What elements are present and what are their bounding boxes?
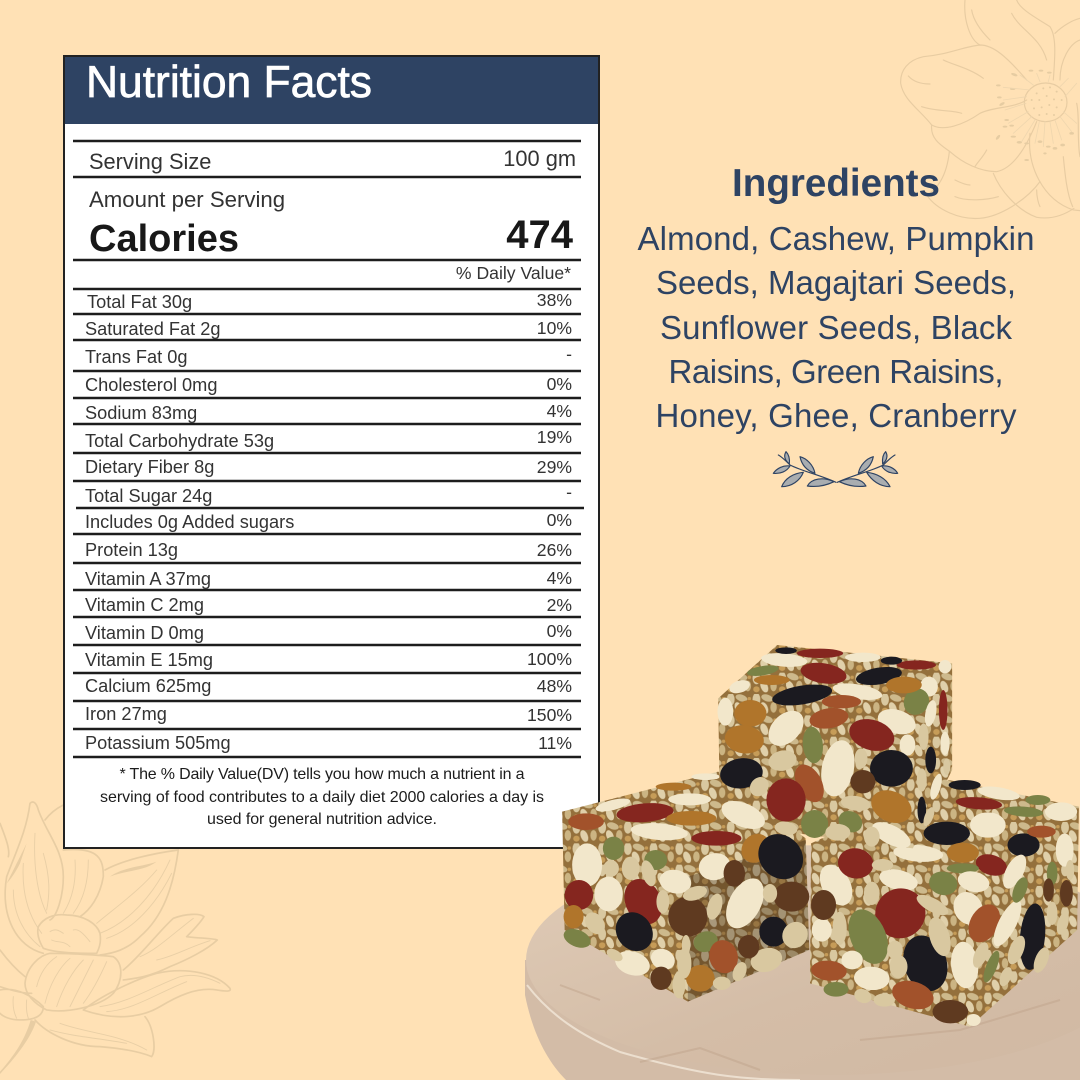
serving size row: 100 gm	[503, 146, 576, 171]
row: dietary fiber	[85, 457, 572, 477]
row: trans fat: Trans Fat 0g	[85, 347, 187, 367]
decorative flower: bottom left lotus	[0, 802, 230, 1074]
row: saturated fat: 10%	[537, 318, 572, 338]
row: calcium: Calcium 625mg	[85, 676, 211, 696]
row: vitamin a: 4%	[547, 568, 572, 588]
row: added sugars	[85, 510, 572, 532]
row: total sugar: -	[566, 482, 572, 502]
ingredients list	[638, 220, 1034, 434]
row: sodium: Sodium 83mg	[85, 403, 197, 423]
row: vitamin c	[85, 595, 572, 615]
calories row	[89, 213, 574, 260]
row: potassium: 11%	[538, 733, 572, 753]
row: calcium	[85, 676, 572, 696]
row: total sugar: Total Sugar 24g	[85, 486, 212, 506]
ingredients list: Raisins, Green Raisins,	[668, 353, 1004, 390]
row: iron	[85, 704, 572, 725]
row: dietary fiber: 29%	[537, 457, 572, 477]
row: potassium	[85, 733, 572, 753]
row: saturated fat	[85, 318, 572, 339]
cube: top	[717, 645, 952, 853]
row: saturated fat: Saturated Fat 2g	[85, 319, 220, 339]
row: vitamin c: 2%	[547, 595, 572, 615]
ingredients list: Honey, Ghee, Cranberry	[656, 397, 1017, 434]
row: total carbohydrate	[85, 427, 572, 451]
ingredients list: Seeds, Magajtari Seeds,	[656, 264, 1016, 301]
row: cholesterol: 0%	[547, 374, 572, 394]
serving size row: Serving Size	[89, 149, 211, 174]
row: potassium: Potassium 505mg	[85, 733, 231, 753]
row: vitamin d: Vitamin D 0mg	[85, 623, 204, 643]
row: protein: 26%	[537, 540, 572, 560]
row: iron: Iron 27mg	[85, 704, 167, 724]
decorative flower: top right	[901, 0, 1080, 218]
row: protein	[85, 540, 572, 560]
footnote: used for general nutrition advice.	[207, 811, 437, 828]
row: vitamin a: Vitamin A 37mg	[85, 569, 211, 589]
row: vitamin e	[85, 649, 572, 670]
panel background	[64, 56, 599, 848]
row: vitamin a	[85, 568, 572, 589]
icon: laurel ornament	[773, 452, 898, 487]
daily value heading: % Daily Value*	[456, 263, 571, 283]
ingredients heading: Ingredients	[732, 162, 940, 205]
heading: Nutrition Facts	[86, 58, 372, 107]
row: total carbohydrate: Total Carbohydrate 53g	[85, 431, 274, 451]
ingredients list: Almond, Cashew, Pumpkin	[638, 220, 1034, 257]
row: vitamin d	[85, 621, 572, 643]
calories row: 474	[506, 213, 574, 257]
row: cholesterol	[85, 374, 572, 395]
row: protein: Protein 13g	[85, 540, 178, 560]
row: vitamin d: 0%	[547, 621, 572, 641]
row: added sugars: Includes 0g Added sugars	[85, 512, 294, 532]
row: total fat: Total Fat 30g	[87, 292, 192, 312]
footnote	[100, 766, 544, 828]
row: dietary fiber: Dietary Fiber 8g	[85, 457, 214, 477]
row: added sugars: 0%	[547, 510, 572, 530]
marble platter	[525, 845, 1080, 1080]
row: total carbohydrate: 19%	[537, 427, 572, 447]
calories row: Calories	[89, 218, 239, 260]
row: total fat	[87, 290, 572, 312]
row: vitamin e: Vitamin E 15mg	[85, 650, 213, 670]
row: sodium: 4%	[547, 401, 572, 421]
row: trans fat	[85, 344, 572, 367]
footnote: serving of food contributes to a daily diet 2000 calories a day is	[100, 789, 544, 806]
row: vitamin c: Vitamin C 2mg	[85, 595, 204, 615]
row: calcium: 48%	[537, 676, 572, 696]
row: iron: 150%	[527, 705, 572, 725]
amount per serving: Amount per Serving	[89, 187, 285, 212]
cube: left	[560, 772, 812, 1002]
product photo: nut and seed cubes	[560, 645, 1079, 1027]
row: trans fat: -	[566, 344, 572, 364]
serving size row	[89, 146, 576, 174]
row: total sugar	[85, 482, 572, 506]
row: cholesterol: Cholesterol 0mg	[85, 375, 217, 395]
header band	[65, 57, 598, 124]
cube: right	[810, 780, 1079, 1027]
row: sodium	[85, 401, 572, 423]
row: total fat: 38%	[537, 290, 572, 310]
ingredients list: Sunflower Seeds, Black	[660, 309, 1012, 346]
footnote: * The % Daily Value(DV) tells you how much a nutrient in a	[120, 766, 525, 783]
row: vitamin e: 100%	[527, 649, 572, 669]
panel: nutrition facts	[64, 56, 599, 848]
